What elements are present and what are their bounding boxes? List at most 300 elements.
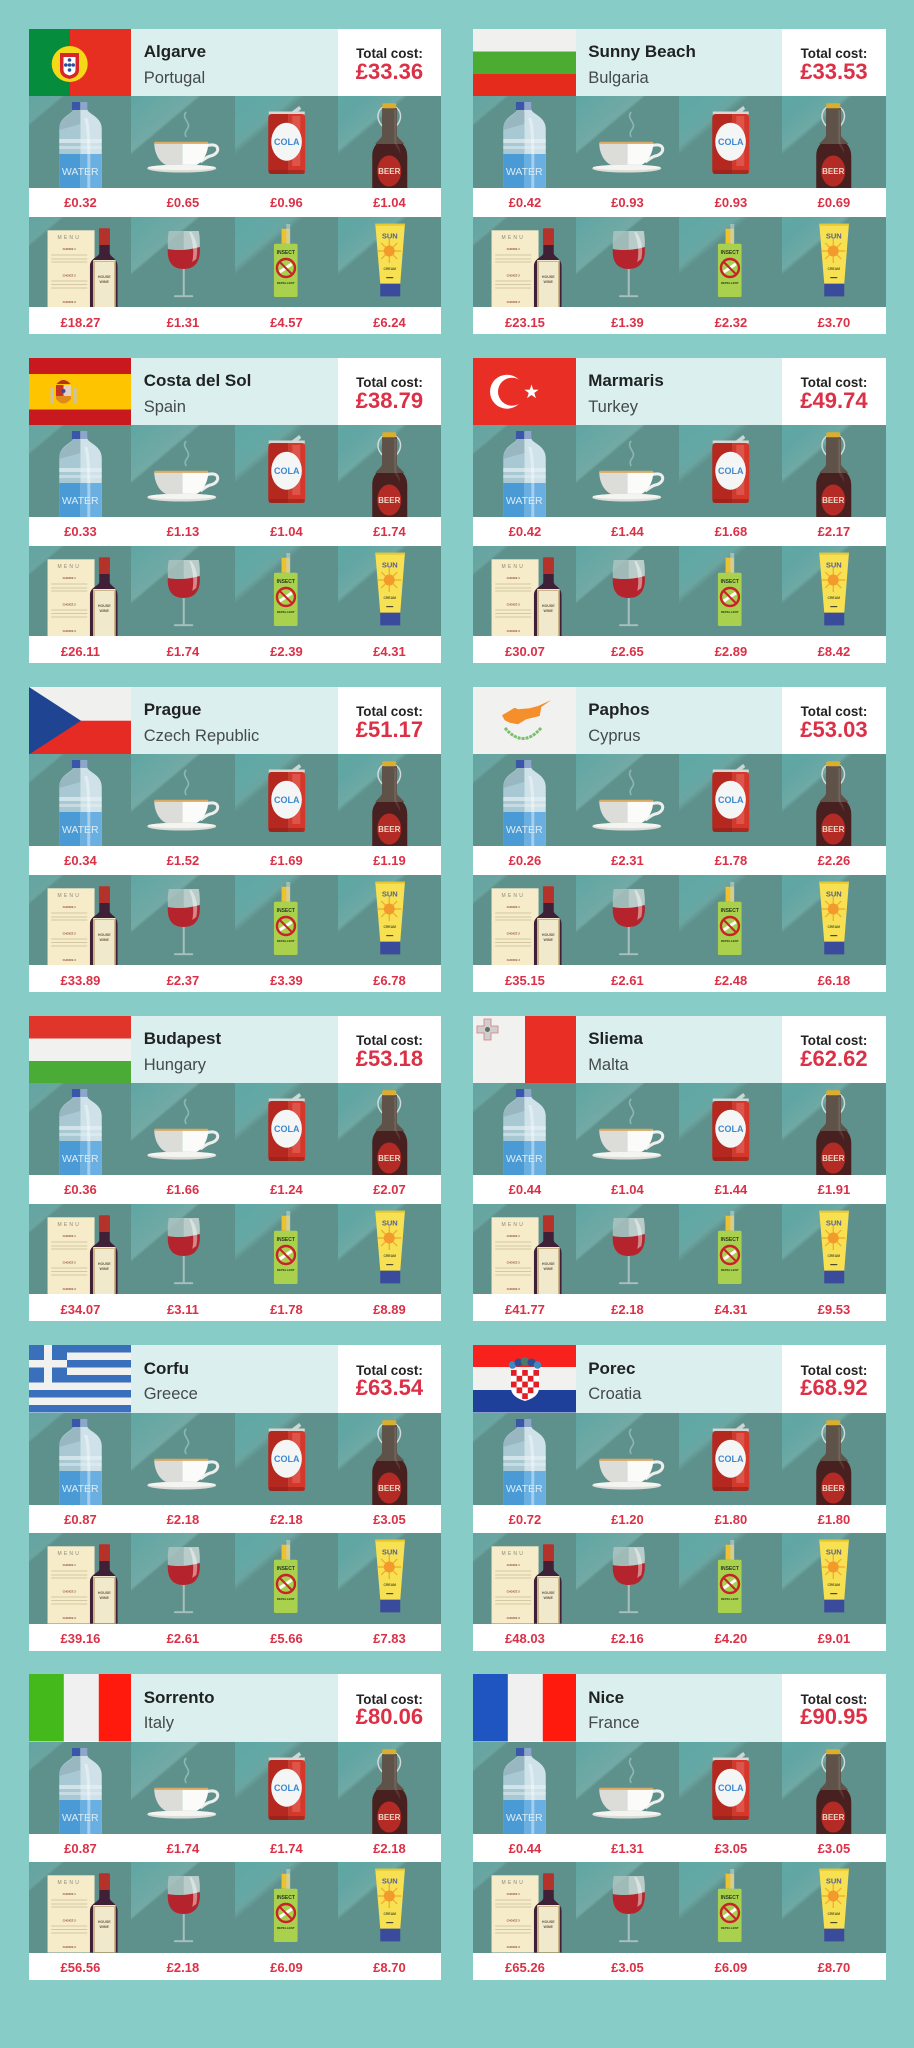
item: sun cream: £9.53: [818, 1302, 850, 1317]
total cost: Total cost:: [801, 1692, 867, 1706]
total cost: [782, 1345, 886, 1412]
item: water: £0.44: [509, 1182, 541, 1197]
item: glass of wine: [576, 216, 679, 334]
total cost: £51.17: [356, 717, 423, 742]
location: Paphos: [576, 687, 782, 754]
item: coffee: [576, 96, 679, 216]
item: insect repellent: £2.89: [715, 644, 747, 659]
item: water: WATER: [62, 166, 99, 178]
item: cola: COLA: [718, 466, 744, 476]
item: cola: COLA: [718, 1124, 744, 1134]
location: Algarve: Algarve: [144, 42, 206, 61]
item: beer: [782, 1412, 886, 1533]
location: Prague: [131, 687, 338, 754]
item: glass of wine: £2.37: [167, 973, 199, 988]
item: beer: £0.69: [818, 195, 850, 210]
location: Algarve: [131, 28, 338, 96]
item: water: £0.32: [64, 195, 97, 210]
item: glass of wine: [131, 1204, 235, 1321]
item: water: [29, 1083, 132, 1204]
item: sun cream: [782, 875, 886, 992]
item: sun cream: [782, 1862, 886, 1980]
item: water: WATER: [62, 1153, 99, 1165]
panel: Sorrento, Italy: [29, 1674, 441, 1980]
location: Corfu: Corfu: [144, 1358, 189, 1378]
item: beer: BEER: [378, 167, 400, 176]
location: Sorrento: Sorrento: [144, 1688, 215, 1706]
total cost: £90.95: [800, 1704, 868, 1729]
item: beer: £2.18: [373, 1840, 406, 1856]
item: meal and wine: MENU: [57, 1880, 81, 1886]
item: sun cream: £6.18: [818, 973, 850, 988]
item: cola: [679, 425, 783, 546]
item: insect repellent: [679, 1204, 783, 1321]
item: meal and wine: £39.16: [61, 1631, 100, 1646]
item: cola: [679, 1083, 783, 1204]
item: coffee: £1.44: [611, 524, 644, 539]
item: water: £0.34: [64, 853, 97, 868]
item: meal and wine: MENU: [57, 234, 81, 240]
item: glass of wine: £2.61: [611, 973, 644, 988]
location: Budapest: [131, 1016, 338, 1083]
item: coffee: £1.04: [611, 1182, 644, 1197]
item: water: [473, 425, 577, 546]
item: meal and wine: MENU: [502, 1551, 525, 1557]
panel: Nice, France: [473, 1674, 886, 1980]
total cost: Total cost:: [356, 704, 423, 719]
item: coffee: [131, 754, 235, 875]
item: cola: COLA: [718, 1782, 744, 1792]
flag: Portugal: [29, 29, 131, 96]
total cost: Total cost:: [801, 704, 867, 719]
item: insect repellent: INSECT: [276, 1237, 295, 1243]
item: cola: £1.68: [715, 524, 747, 539]
item: beer: BEER: [822, 496, 845, 505]
item: insect repellent: [235, 1862, 338, 1980]
item: coffee: [131, 425, 235, 546]
item: sun cream: £7.83: [373, 1631, 406, 1646]
item: cola: [235, 425, 338, 546]
item: cola: £3.05: [715, 1840, 747, 1856]
item: beer: [338, 754, 441, 875]
location: Sorrento: [131, 1674, 338, 1742]
item: cola: £1.04: [270, 524, 303, 539]
item: sun cream: SUN: [382, 1218, 397, 1227]
location: Costa del Sol: Spain: [144, 398, 186, 416]
item: insect repellent: £6.09: [715, 1960, 747, 1975]
item: insect repellent: INSECT: [276, 1566, 295, 1572]
item: beer: £2.07: [373, 1182, 406, 1197]
item: water: [473, 754, 577, 875]
item: meal and wine: [29, 875, 132, 992]
item: meal and wine: £33.89: [61, 973, 100, 988]
total cost: [338, 358, 441, 425]
item: glass of wine: [576, 546, 679, 663]
item: beer: £2.26: [818, 853, 850, 868]
item: beer: [782, 1083, 886, 1204]
total cost: Total cost:: [356, 1362, 423, 1378]
item: glass of wine: £2.16: [611, 1631, 644, 1646]
item: cola: COLA: [718, 795, 744, 805]
item: meal and wine: £34.07: [61, 1302, 100, 1317]
item: insect repellent: INSECT: [276, 908, 295, 914]
item: beer: £1.91: [818, 1182, 850, 1197]
location: Sorrento: Italy: [144, 1714, 174, 1732]
item: sun cream: [338, 1862, 441, 1980]
item: water: £0.42: [509, 524, 541, 539]
item: glass of wine: £2.18: [611, 1302, 644, 1317]
location: Sunny Beach: Bulgaria: [588, 68, 649, 86]
item: beer: £2.17: [818, 524, 850, 539]
location: Prague: Prague: [144, 700, 201, 719]
item: water: WATER: [506, 166, 543, 178]
item: water: WATER: [506, 1482, 543, 1494]
item: sun cream: SUN: [382, 231, 397, 240]
item: cola: [235, 754, 338, 875]
item: glass of wine: £1.74: [167, 644, 199, 659]
item: beer: [338, 96, 441, 216]
item: sun cream: [782, 546, 886, 663]
item: cola: COLA: [274, 795, 300, 805]
item: meal and wine: £41.77: [505, 1302, 545, 1317]
item: glass of wine: [131, 216, 235, 334]
panel: Sliema, Malta: [473, 1016, 886, 1321]
item: coffee: [576, 1083, 679, 1204]
location: Costa del Sol: Costa del Sol: [144, 371, 251, 390]
item: cola: £1.74: [270, 1840, 303, 1856]
panel: Corfu, Greece: [29, 1345, 441, 1650]
location: Sliema: Malta: [588, 1056, 629, 1074]
item: water: WATER: [62, 1482, 99, 1494]
item: insect repellent: [679, 546, 783, 663]
item: sun cream: SUN: [826, 560, 842, 569]
item: coffee: £1.66: [167, 1182, 199, 1197]
item: cola: [679, 1742, 783, 1862]
item: water: WATER: [506, 824, 543, 836]
total cost: £63.54: [356, 1375, 423, 1400]
total cost: £80.06: [356, 1704, 423, 1729]
flag: Bulgaria: [473, 29, 576, 96]
item: insect repellent: £2.48: [715, 973, 747, 988]
item: meal and wine: [473, 546, 577, 663]
item: meal and wine: [473, 1533, 577, 1650]
item: water: £0.87: [64, 1840, 97, 1856]
item: beer: £1.74: [373, 524, 406, 539]
location: Algarve: Portugal: [144, 68, 205, 86]
item: beer: BEER: [822, 167, 845, 176]
item: cola: COLA: [274, 466, 300, 476]
flag: Czech Republic: [29, 687, 131, 754]
item: water: £0.72: [509, 1512, 541, 1526]
location: Sliema: [576, 1016, 782, 1083]
item: cola: [235, 96, 338, 216]
location: Marmaris: Turkey: [588, 398, 638, 416]
item: sun cream: £8.89: [373, 1302, 406, 1317]
item: sun cream: [338, 1204, 441, 1321]
item: cola: £1.44: [715, 1182, 747, 1197]
item: beer: [782, 1742, 886, 1862]
item: insect repellent: £3.39: [270, 973, 303, 988]
item: insect repellent: INSECT: [276, 1895, 295, 1901]
item: insect repellent: £2.32: [715, 314, 747, 330]
item: coffee: £2.18: [167, 1512, 199, 1526]
item: sun cream: SUN: [382, 560, 397, 569]
item: beer: £1.04: [373, 195, 406, 210]
item: meal and wine: £56.56: [61, 1960, 100, 1975]
location: Budapest: Hungary: [144, 1056, 206, 1074]
item: glass of wine: [576, 875, 679, 992]
item: beer: [782, 425, 886, 546]
total cost: £53.18: [356, 1046, 423, 1071]
item: beer: BEER: [822, 1154, 845, 1163]
item: sun cream: SUN: [826, 1218, 842, 1227]
item: meal and wine: [29, 1862, 132, 1980]
item: water: WATER: [62, 495, 99, 507]
total cost: £53.03: [800, 717, 868, 742]
item: cola: [235, 1412, 338, 1533]
item: coffee: [576, 1742, 679, 1862]
item: insect repellent: [235, 216, 338, 334]
item: meal and wine: [473, 1862, 577, 1980]
total cost: [338, 1674, 441, 1742]
panel: Paphos, Cyprus: [473, 687, 886, 992]
location: Costa del Sol: [131, 358, 338, 425]
item: cola: [679, 754, 783, 875]
item: meal and wine: £65.26: [505, 1960, 545, 1975]
item: insect repellent: £4.57: [270, 314, 303, 330]
item: glass of wine: £3.05: [611, 1960, 644, 1975]
item: meal and wine: MENU: [502, 893, 525, 899]
item: beer: [338, 1742, 441, 1862]
item: insect repellent: INSECT: [721, 579, 739, 585]
item: coffee: £1.52: [167, 853, 199, 868]
item: insect repellent: [235, 546, 338, 663]
item: glass of wine: [576, 1204, 679, 1321]
flag: Hungary: [29, 1016, 131, 1083]
item: insect repellent: INSECT: [721, 1566, 739, 1572]
item: water: [473, 1742, 577, 1862]
item: insect repellent: [679, 875, 783, 992]
location: Corfu: [131, 1345, 338, 1412]
panel: Prague, Czech Republic: [29, 687, 441, 992]
item: meal and wine: [473, 1204, 577, 1321]
item: glass of wine: £3.11: [167, 1302, 199, 1317]
total cost: £68.92: [800, 1375, 868, 1400]
item: meal and wine: £48.03: [505, 1631, 545, 1646]
item: sun cream: [338, 216, 441, 334]
item: insect repellent: [679, 216, 783, 334]
item: glass of wine: £2.18: [167, 1960, 199, 1975]
total cost: Total cost:: [801, 1362, 867, 1378]
item: beer: [338, 425, 441, 546]
item: insect repellent: INSECT: [721, 1895, 739, 1901]
total cost: £49.74: [800, 388, 868, 413]
item: meal and wine: £26.11: [61, 644, 100, 659]
item: water: £0.36: [64, 1182, 97, 1197]
item: glass of wine: £2.65: [611, 644, 644, 659]
location: Porec: [576, 1345, 782, 1412]
total cost: [782, 358, 886, 425]
item: glass of wine: [131, 1533, 235, 1650]
item: coffee: [131, 1412, 235, 1533]
item: beer: BEER: [378, 825, 400, 834]
item: beer: [338, 1083, 441, 1204]
item: beer: BEER: [822, 1812, 845, 1822]
total cost: [338, 1016, 441, 1083]
item: water: [473, 1412, 577, 1533]
item: beer: BEER: [822, 1484, 845, 1492]
item: beer: BEER: [378, 1154, 400, 1163]
item: meal and wine: £35.15: [505, 973, 545, 988]
location: Porec: Porec: [588, 1358, 635, 1378]
item: sun cream: SUN: [382, 1548, 397, 1556]
flag: Greece: [29, 1345, 131, 1412]
item: beer: £3.05: [373, 1512, 406, 1526]
total cost: Total cost:: [356, 375, 423, 390]
item: water: WATER: [506, 1812, 543, 1824]
item: insect repellent: [235, 1204, 338, 1321]
panel: Sunny Beach, Bulgaria: [473, 28, 886, 334]
item: insect repellent: £4.20: [715, 1631, 747, 1646]
item: beer: £1.80: [818, 1512, 850, 1526]
item: cola: £2.18: [270, 1512, 303, 1526]
item: meal and wine: MENU: [57, 564, 81, 570]
flag: Turkey: [473, 358, 576, 425]
item: cola: COLA: [718, 1454, 744, 1464]
total cost: Total cost:: [356, 1033, 423, 1048]
item: insect repellent: [679, 1862, 783, 1980]
total cost: [782, 28, 886, 96]
item: cola: COLA: [274, 137, 300, 147]
item: sun cream: £4.31: [373, 644, 406, 659]
location: Marmaris: [576, 358, 782, 425]
item: sun cream: [782, 216, 886, 334]
item: beer: BEER: [378, 1484, 400, 1492]
item: insect repellent: [235, 1533, 338, 1650]
item: glass of wine: £1.39: [611, 314, 644, 330]
flag: Cyprus: [473, 687, 576, 754]
item: water: £0.44: [509, 1840, 541, 1856]
total cost: [338, 687, 441, 754]
item: meal and wine: MENU: [57, 1551, 81, 1557]
item: cola: [679, 96, 783, 216]
item: coffee: £0.93: [611, 195, 644, 210]
item: water: WATER: [62, 1812, 99, 1824]
total cost: £38.79: [356, 388, 423, 413]
item: coffee: £0.65: [167, 195, 199, 210]
item: sun cream: £3.70: [818, 314, 850, 330]
item: beer: £3.05: [818, 1840, 850, 1856]
total cost: [338, 28, 441, 96]
item: insect repellent: £1.78: [270, 1302, 303, 1317]
item: sun cream: [782, 1204, 886, 1321]
total cost: Total cost:: [356, 46, 423, 61]
item: water: £0.42: [509, 195, 541, 210]
item: beer: BEER: [822, 825, 845, 834]
total cost: Total cost:: [801, 46, 867, 61]
item: cola: COLA: [274, 1454, 300, 1464]
item: meal and wine: [29, 546, 132, 663]
item: cola: COLA: [274, 1782, 300, 1792]
location: Nice: France: [588, 1714, 640, 1732]
item: water: [473, 1083, 577, 1204]
total cost: [782, 687, 886, 754]
item: sun cream: SUN: [826, 231, 842, 240]
item: sun cream: £8.70: [818, 1960, 850, 1975]
item: coffee: [576, 425, 679, 546]
item: meal and wine: MENU: [57, 1222, 81, 1228]
total cost: £62.62: [800, 1046, 868, 1071]
location: Nice: [576, 1674, 782, 1742]
item: cola: £1.24: [270, 1182, 303, 1197]
item: insect repellent: [235, 875, 338, 992]
total cost: £33.53: [800, 58, 868, 84]
item: coffee: [131, 96, 235, 216]
item: meal and wine: £23.15: [505, 314, 545, 330]
item: water: £0.26: [509, 853, 541, 868]
item: insect repellent: £6.09: [270, 1960, 303, 1975]
item: glass of wine: £2.61: [167, 1631, 199, 1646]
location: Corfu: Greece: [144, 1385, 198, 1403]
item: sun cream: SUN: [382, 1876, 397, 1886]
item: beer: BEER: [378, 496, 400, 505]
item: beer: [782, 754, 886, 875]
item: insect repellent: INSECT: [721, 908, 739, 914]
item: coffee: £1.31: [611, 1840, 644, 1856]
item: coffee: £2.31: [611, 853, 644, 868]
flag: Spain: [29, 358, 131, 425]
item: beer: BEER: [378, 1812, 400, 1822]
item: cola: £1.80: [715, 1512, 747, 1526]
location: Prague: Czech Republic: [144, 727, 259, 745]
item: cola: COLA: [718, 137, 744, 147]
item: cola: £1.78: [715, 853, 747, 868]
item: coffee: £1.74: [167, 1840, 199, 1856]
item: water: [29, 754, 132, 875]
item: meal and wine: MENU: [502, 234, 525, 240]
item: water: [473, 96, 577, 216]
item: water: WATER: [62, 824, 99, 836]
item: coffee: [131, 1083, 235, 1204]
flag: Malta: [473, 1016, 576, 1083]
item: insect repellent: £5.66: [270, 1631, 303, 1646]
item: insect repellent: INSECT: [721, 1237, 739, 1243]
panel: Budapest, Hungary: [29, 1016, 441, 1321]
item: insect repellent: [679, 1533, 783, 1650]
item: water: £0.87: [64, 1512, 97, 1526]
panel: Costa del Sol, Spain: [29, 358, 441, 663]
item: coffee: [576, 754, 679, 875]
item: sun cream: [338, 546, 441, 663]
location: Sunny Beach: Sunny Beach: [588, 42, 696, 61]
item: insect repellent: £4.31: [715, 1302, 747, 1317]
total cost: Total cost:: [356, 1692, 423, 1706]
item: glass of wine: [576, 1533, 679, 1650]
item: meal and wine: MENU: [57, 893, 81, 899]
item: glass of wine: [131, 875, 235, 992]
item: glass of wine: [131, 546, 235, 663]
item: meal and wine: MENU: [502, 564, 525, 570]
item: sun cream: £6.78: [373, 973, 406, 988]
total cost: £33.36: [356, 58, 423, 84]
item: insect repellent: INSECT: [276, 250, 295, 256]
item: coffee: [131, 1742, 235, 1862]
item: beer: [338, 1412, 441, 1533]
location: Budapest: Budapest: [144, 1029, 221, 1048]
item: insect repellent: £2.39: [270, 644, 303, 659]
item: insect repellent: INSECT: [721, 250, 739, 256]
total cost: [338, 1345, 441, 1412]
